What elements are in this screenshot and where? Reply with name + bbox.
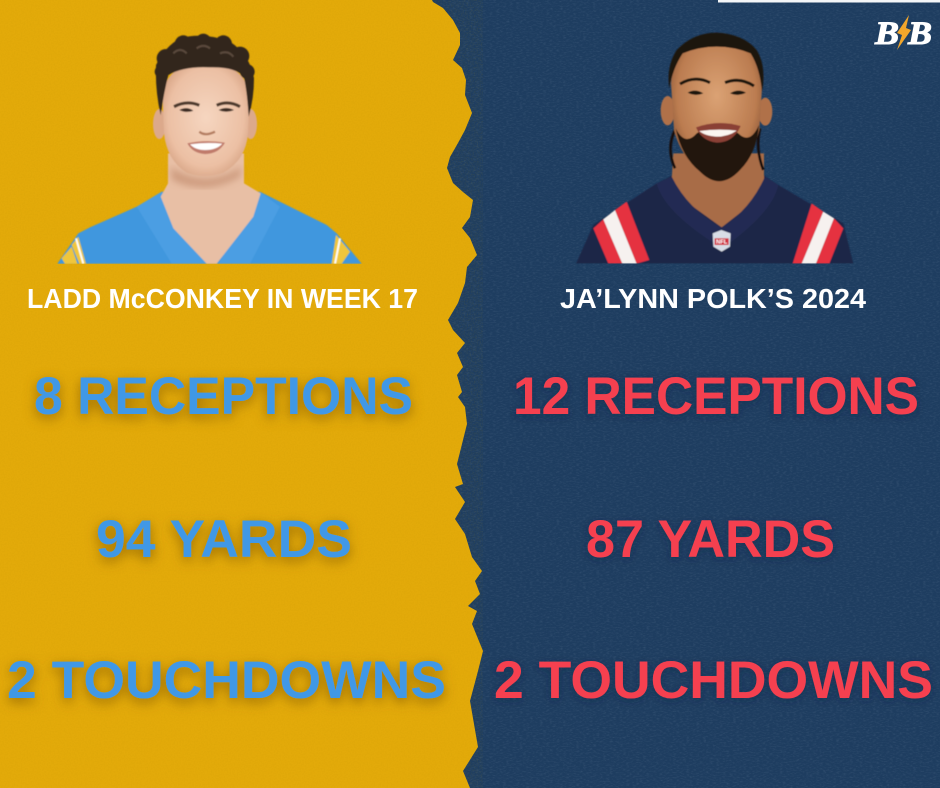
stat: 2 touchdowns: 2 TOUCHDOWNS — [7, 651, 446, 710]
hair — [155, 34, 255, 117]
mouth — [696, 123, 741, 143]
stat: 12 receptions: 12 RECEPTIONS — [513, 367, 919, 426]
portrait: Ladd McConkey — [57, 34, 362, 264]
mouth — [187, 141, 225, 154]
left shoulder stripes — [593, 219, 622, 264]
logo: B bolt B: B — [907, 16, 932, 52]
heading: Polk: JA’LYNN POLK’S 2024 — [560, 283, 866, 314]
neck and chest — [161, 153, 261, 264]
stat: 94 yards: 94 YARDS — [96, 510, 352, 569]
beard — [676, 125, 759, 181]
neck shadow — [171, 167, 241, 188]
face — [163, 63, 249, 176]
eyes — [179, 108, 234, 112]
hair — [669, 33, 763, 92]
logo: B bolt B: B — [874, 16, 899, 52]
hair highlights — [173, 46, 233, 57]
ears — [661, 96, 675, 125]
face — [670, 46, 763, 163]
heading: McConkey: LADD McCONKEY IN WEEK 17 — [27, 283, 418, 314]
eyebrows — [680, 79, 754, 86]
jersey collar shade — [137, 192, 280, 264]
ears — [153, 109, 166, 139]
white strip at top edge — [718, 0, 940, 2]
yellow paper texture — [0, 0, 483, 788]
icon: lightning bolt — [897, 15, 911, 50]
stat: 87 yards: 87 YARDS — [586, 510, 835, 569]
eyes — [688, 91, 746, 95]
right shoulder stripes — [793, 203, 823, 264]
portrait: Ja'Lynn Polk — [576, 33, 853, 264]
neck — [672, 153, 764, 227]
NFL shield: NFL — [716, 240, 728, 246]
sleeve stripes — [62, 237, 86, 264]
navy paper texture — [440, 0, 940, 788]
stat: 8 receptions: 8 RECEPTIONS — [34, 367, 413, 426]
NFL shield — [713, 230, 731, 252]
logo: B bolt B — [874, 15, 932, 52]
panel: torn yellow left side — [0, 0, 483, 788]
jersey — [57, 192, 362, 264]
nose — [199, 132, 215, 134]
collar — [657, 177, 778, 242]
jersey — [576, 175, 853, 264]
stat: 2 touchdowns right: 2 TOUCHDOWNS — [494, 651, 933, 710]
eyebrows — [174, 103, 240, 107]
braids — [670, 128, 763, 170]
